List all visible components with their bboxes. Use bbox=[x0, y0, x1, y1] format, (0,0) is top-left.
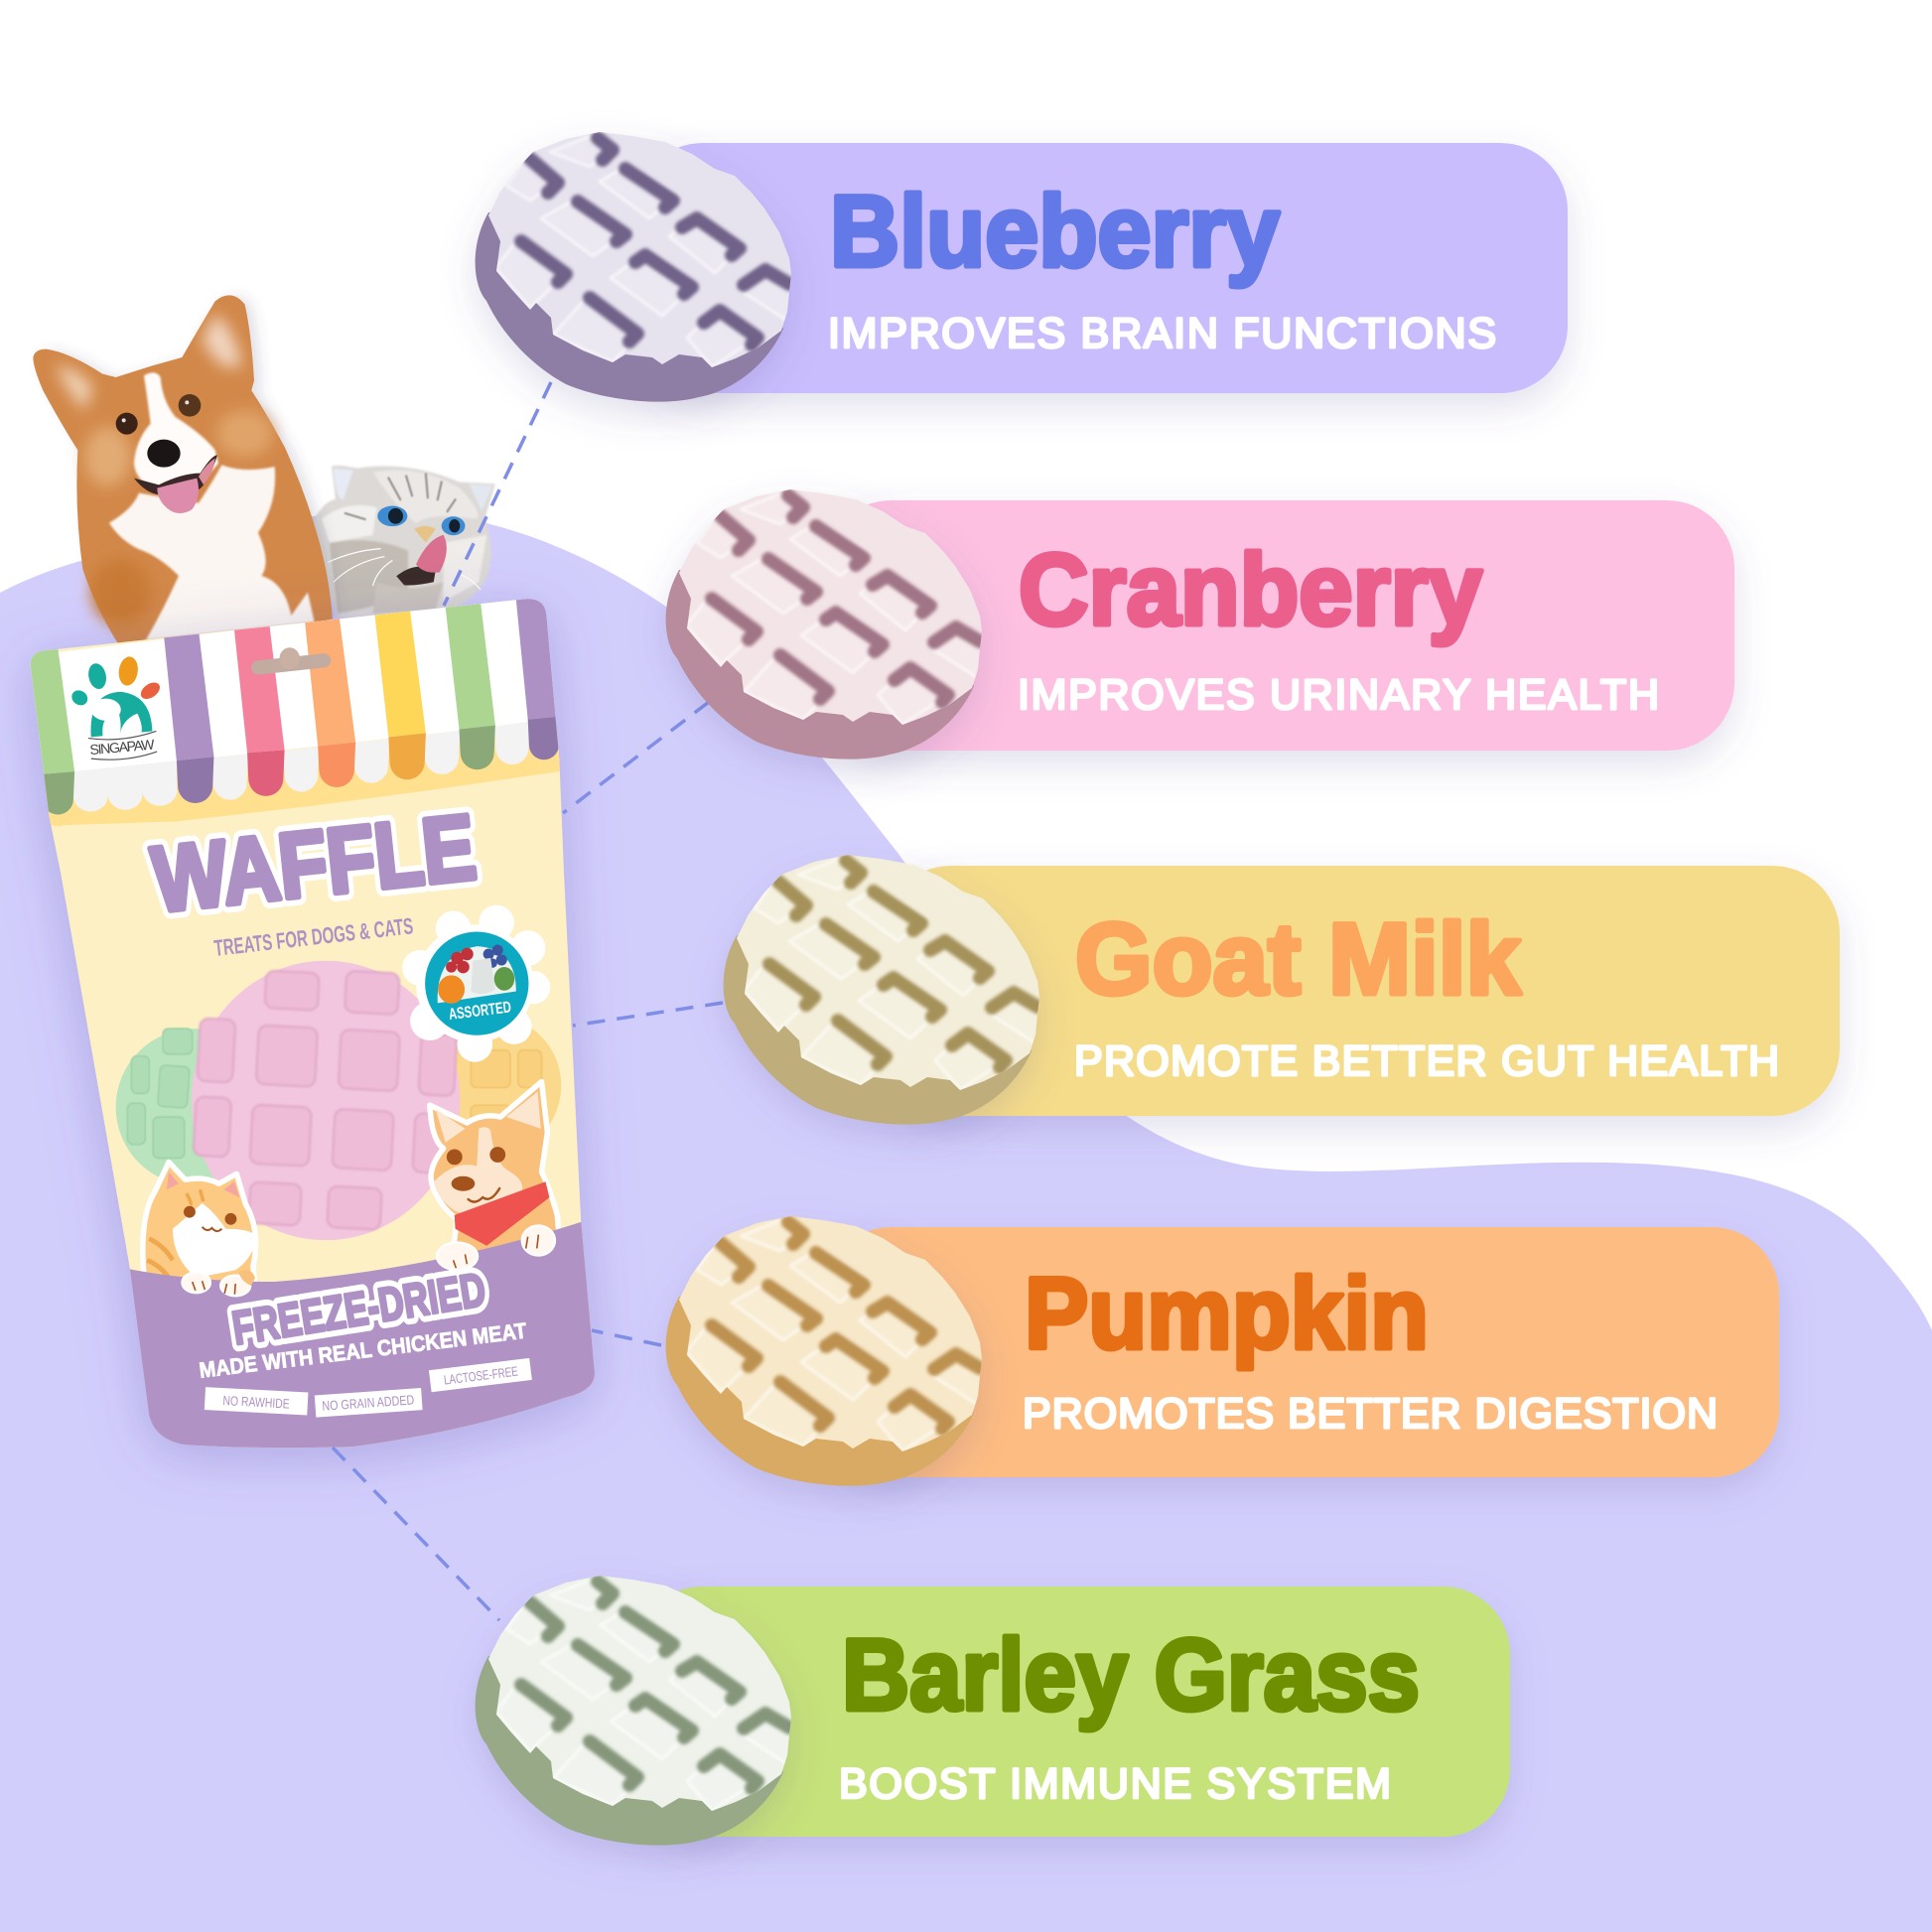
WAFFLE title on pack: WAFFLE bbox=[148, 795, 481, 931]
connector: barley grass bbox=[333, 1448, 499, 1620]
benefit: IMPROVES BRAIN FUNCTIONS bbox=[828, 310, 1496, 357]
FREEZE-DRIED text: FREEZE-DRIED bbox=[229, 1264, 489, 1355]
FREEZE-DRIED text: FREEZE-DRIED bbox=[229, 1264, 489, 1355]
awning stripes bbox=[24, 590, 569, 814]
logo SINGAPAW bbox=[69, 655, 163, 759]
FREEZE-DRIED text bbox=[229, 1264, 489, 1355]
cartoon corgi bbox=[430, 1081, 561, 1262]
waffle bbox=[712, 841, 1049, 1139]
waffle bbox=[464, 1562, 801, 1860]
waffle art: yellow bbox=[444, 1029, 562, 1125]
purple bottom band bbox=[129, 1221, 595, 1448]
photo: corgi dog bbox=[33, 295, 333, 645]
cartoon cat bbox=[143, 1162, 257, 1290]
WAFFLE title on pack bbox=[142, 806, 483, 919]
benefit: PROMOTES BETTER DIGESTION bbox=[1023, 1390, 1718, 1438]
connector: cranberry bbox=[563, 702, 709, 813]
bar bbox=[884, 866, 1840, 1116]
panel: cranberry bbox=[654, 476, 1734, 773]
photo: cat bbox=[314, 466, 495, 618]
heading: Barley Grass bbox=[842, 1618, 1420, 1731]
cartoon paws bbox=[182, 1226, 555, 1296]
awning yellow scallop shadow bbox=[24, 728, 569, 826]
waffle bbox=[654, 476, 992, 773]
panel: goat milk bbox=[712, 841, 1840, 1139]
waffle bbox=[654, 1202, 992, 1500]
panel: barley grass bbox=[464, 1562, 1510, 1860]
logo SINGAPAW: SINGAPAW bbox=[89, 737, 156, 759]
heading: Blueberry bbox=[830, 175, 1280, 288]
benefit: IMPROVES URINARY HEALTH bbox=[1018, 671, 1659, 719]
assorted badge bbox=[402, 905, 550, 1062]
claim: no grain added: NO GRAIN ADDED bbox=[322, 1392, 415, 1414]
claim: no grain added bbox=[315, 1388, 423, 1418]
claim: no rawhide bbox=[205, 1387, 308, 1415]
assorted badge: ASSORTED bbox=[448, 998, 512, 1024]
panel: blueberry bbox=[464, 118, 1568, 416]
benefit: PROMOTE BETTER GUT HEALTH bbox=[1074, 1037, 1779, 1085]
waffle bbox=[464, 118, 801, 416]
heading: Goat Milk bbox=[1075, 902, 1521, 1016]
connector: pumpkin bbox=[592, 1330, 661, 1345]
eyes and tongue of cat bbox=[328, 506, 481, 590]
waffle art: green bbox=[115, 1027, 214, 1179]
heading: Pumpkin bbox=[1025, 1257, 1429, 1370]
claim: no rawhide: NO RAWHIDE bbox=[222, 1393, 290, 1412]
background lavender wave bbox=[0, 512, 1932, 1932]
panel: pumpkin bbox=[654, 1202, 1779, 1500]
WAFFLE title on pack: WAFFLE bbox=[148, 795, 481, 931]
connector: goat milk bbox=[573, 1003, 723, 1026]
hang hole bbox=[258, 647, 324, 669]
waffle art: pink bbox=[190, 961, 460, 1240]
bar bbox=[635, 143, 1568, 393]
bar bbox=[824, 500, 1734, 751]
bar bbox=[824, 1227, 1779, 1477]
bar bbox=[635, 1587, 1510, 1837]
claim: lactose-free: LACTOSE-FREE bbox=[443, 1364, 519, 1388]
connector to blueberry waffle bbox=[444, 382, 551, 606]
heading: Cranberry bbox=[1019, 533, 1482, 646]
pack cream body bbox=[34, 600, 598, 1448]
product pack bbox=[0, 582, 627, 1501]
treats tagline: TREATS FOR DOGS & CATS bbox=[212, 912, 414, 961]
claim: lactose-free bbox=[429, 1358, 532, 1392]
benefit: BOOST IMMUNE SYSTEM bbox=[839, 1760, 1391, 1808]
made with real chicken meat: MADE WITH REAL CHICKEN MEAT bbox=[198, 1318, 528, 1383]
